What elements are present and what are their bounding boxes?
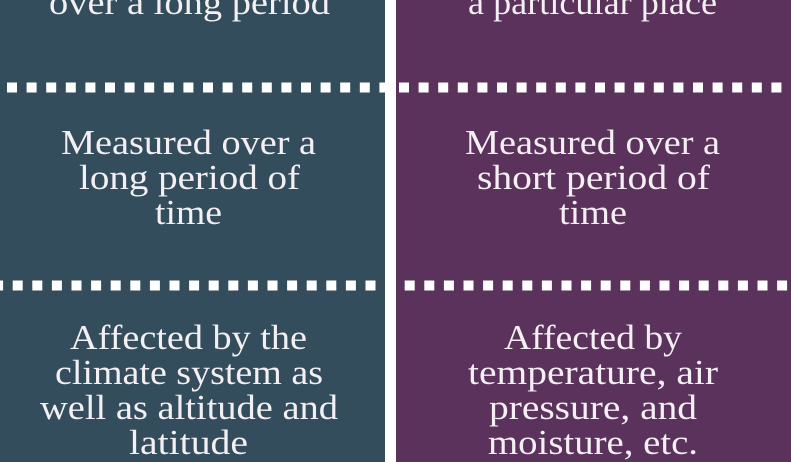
- text: weather influences: pressure, and: [489, 388, 698, 427]
- text: weather influences: temperature, air: [468, 353, 718, 392]
- text: climate measurement: [61, 123, 316, 232]
- panel: weather column: [396, 0, 791, 462]
- text: weather influences: moisture, etc.: [488, 423, 698, 462]
- text: weather measurement: time: [559, 193, 627, 232]
- text: climate influences: well as altitude and: [40, 388, 339, 427]
- divider: bottom dotted row: [0, 280, 791, 290]
- text: weather influences: Affected by: [504, 318, 683, 357]
- text: climate measurement: long period of: [79, 158, 300, 197]
- panel: climate column: [0, 0, 385, 462]
- text: climate measurement: Measured over a: [61, 123, 316, 162]
- text: climate influences: latitude: [129, 423, 248, 462]
- text: weather measurement: short period of: [477, 158, 710, 197]
- divider: top dotted row: [7, 82, 791, 92]
- text: climate influences: [40, 318, 339, 462]
- text: climate influences: Affected by the: [70, 318, 307, 357]
- text: climate measurement: time: [155, 193, 222, 232]
- text: weather influences: [468, 318, 718, 462]
- text: weather measurement: [465, 123, 720, 232]
- text: climate influences: climate system as: [55, 353, 323, 392]
- text: weather measurement: Measured over a: [465, 123, 720, 162]
